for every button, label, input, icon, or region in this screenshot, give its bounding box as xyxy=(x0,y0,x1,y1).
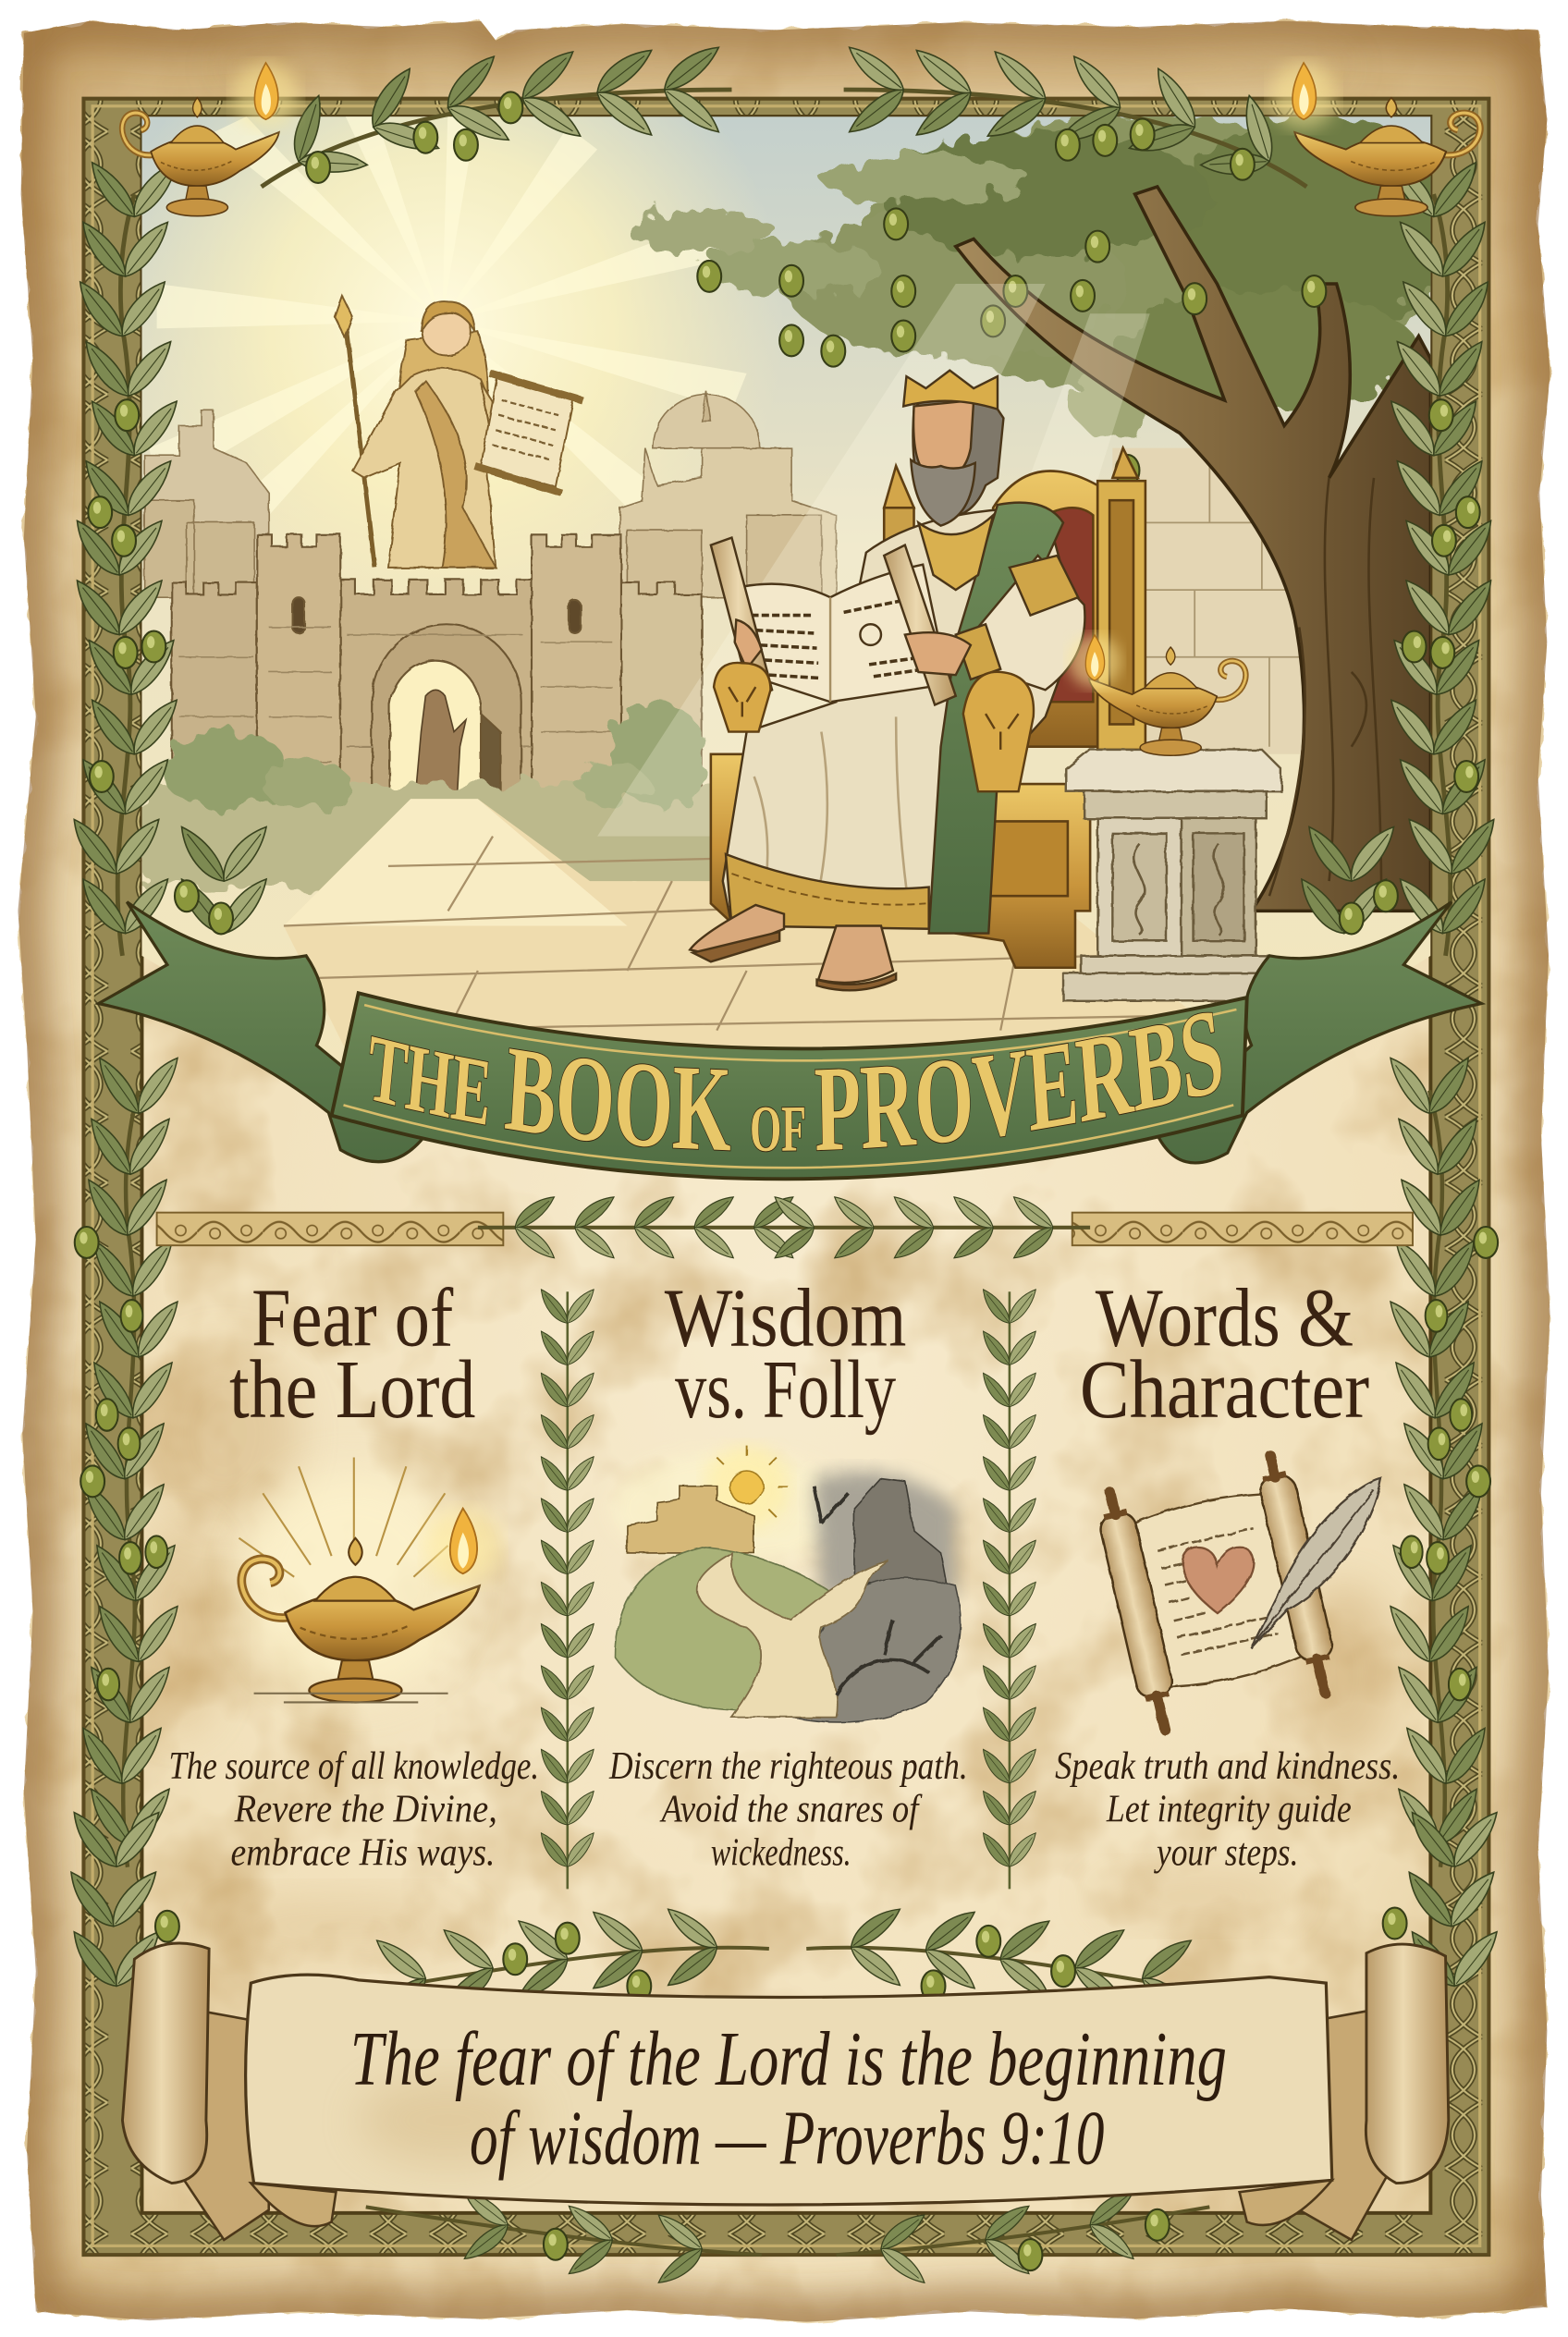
stone wall behind throne xyxy=(1112,448,1306,754)
icon: two paths landscape xyxy=(612,1446,961,1722)
scroll main panel xyxy=(246,1975,1332,2205)
banner title: THE BOOK OF PROVERBS xyxy=(370,1011,1222,1152)
lion armrests xyxy=(714,663,1034,791)
scroll folds xyxy=(179,2009,1389,2240)
column two text: Discern the righteous path. xyxy=(608,1745,968,1788)
small sprig left of banner xyxy=(173,820,274,940)
sleeve xyxy=(971,556,1084,690)
column three text: your steps. xyxy=(1154,1832,1298,1875)
column one heading: Fear of xyxy=(251,1270,454,1364)
column three text: Let integrity guide xyxy=(1106,1789,1352,1831)
green sash xyxy=(929,503,1063,934)
corner lamp top right xyxy=(1271,63,1480,216)
paved courtyard xyxy=(283,799,1187,1047)
column one: fear of the lord xyxy=(169,1270,539,1875)
pedestal xyxy=(1063,750,1284,1000)
column one text: The source of all knowledge. xyxy=(169,1745,539,1788)
open scroll xyxy=(711,538,971,704)
column one heading xyxy=(229,1270,475,1436)
divider: left gold band xyxy=(157,1213,503,1245)
scroll quote: The fear of the Lord is the beginning xyxy=(350,2016,1227,2102)
light beams xyxy=(597,284,1150,837)
column divider left xyxy=(536,1285,598,1889)
king xyxy=(723,371,1084,934)
column one text: Revere the Divine, xyxy=(234,1789,497,1831)
bottom olive sprigs xyxy=(351,1902,1217,2290)
column one heading: the Lord xyxy=(229,1342,475,1436)
traveller in the gate xyxy=(415,690,466,799)
wisdom figure xyxy=(335,296,582,568)
column two heading xyxy=(665,1270,906,1436)
icon: scroll with heart and quill xyxy=(1093,1451,1381,1733)
icon: golden lamp xyxy=(239,1458,501,1702)
oil lamp on pedestal xyxy=(1069,635,1245,755)
tree foliage xyxy=(627,112,1449,436)
olive tree xyxy=(627,112,1449,911)
throne back xyxy=(711,448,1145,968)
column three heading: Character xyxy=(1080,1342,1369,1436)
wisdom glow and rays xyxy=(144,116,747,551)
scroll quote: of wisdom — Proverbs 9:10 xyxy=(470,2096,1104,2182)
sky xyxy=(141,116,1430,1072)
column two heading: vs. Folly xyxy=(675,1342,896,1436)
left roll xyxy=(122,1943,209,2184)
corner lamp top left xyxy=(122,63,299,216)
column three: words and character xyxy=(1055,1270,1400,1875)
green title banner xyxy=(94,900,1486,1181)
distant city xyxy=(145,391,837,597)
right ribbon tail xyxy=(1158,902,1481,1163)
small sprig right of banner xyxy=(1292,820,1401,940)
sandals xyxy=(690,905,896,990)
left ribbon tail xyxy=(99,902,425,1162)
column one text: embrace His ways. xyxy=(231,1832,495,1875)
column two text: wickedness. xyxy=(711,1832,851,1875)
column three text xyxy=(1055,1745,1400,1875)
city gate and walls xyxy=(172,534,702,799)
column three text: Speak truth and kindness. xyxy=(1055,1745,1400,1788)
column two heading: Wisdom xyxy=(665,1270,906,1364)
tree trunk xyxy=(956,187,1430,911)
divider: right gold band xyxy=(1072,1213,1413,1245)
column one text xyxy=(169,1745,539,1875)
right roll xyxy=(1366,1944,1449,2184)
top olive garlands xyxy=(262,39,1306,207)
tree olives xyxy=(697,208,1326,486)
column divider right xyxy=(978,1285,1040,1889)
scroll quote xyxy=(350,2016,1227,2182)
column two text xyxy=(608,1745,968,1875)
column three heading xyxy=(1080,1270,1369,1436)
column three heading: Words & xyxy=(1096,1270,1354,1364)
head xyxy=(913,391,1003,517)
king robe xyxy=(723,508,1078,926)
column two: wisdom vs folly xyxy=(608,1270,968,1875)
gold hem xyxy=(726,854,929,929)
divider: olive sprig xyxy=(478,1191,1090,1265)
banner main panel xyxy=(332,993,1247,1179)
hero illustration xyxy=(142,116,1431,1047)
side olive vines xyxy=(62,155,1504,1993)
bottom parchment scroll xyxy=(122,1943,1449,2240)
column two text: Avoid the snares of xyxy=(659,1789,923,1831)
ground and bushes xyxy=(142,699,710,895)
